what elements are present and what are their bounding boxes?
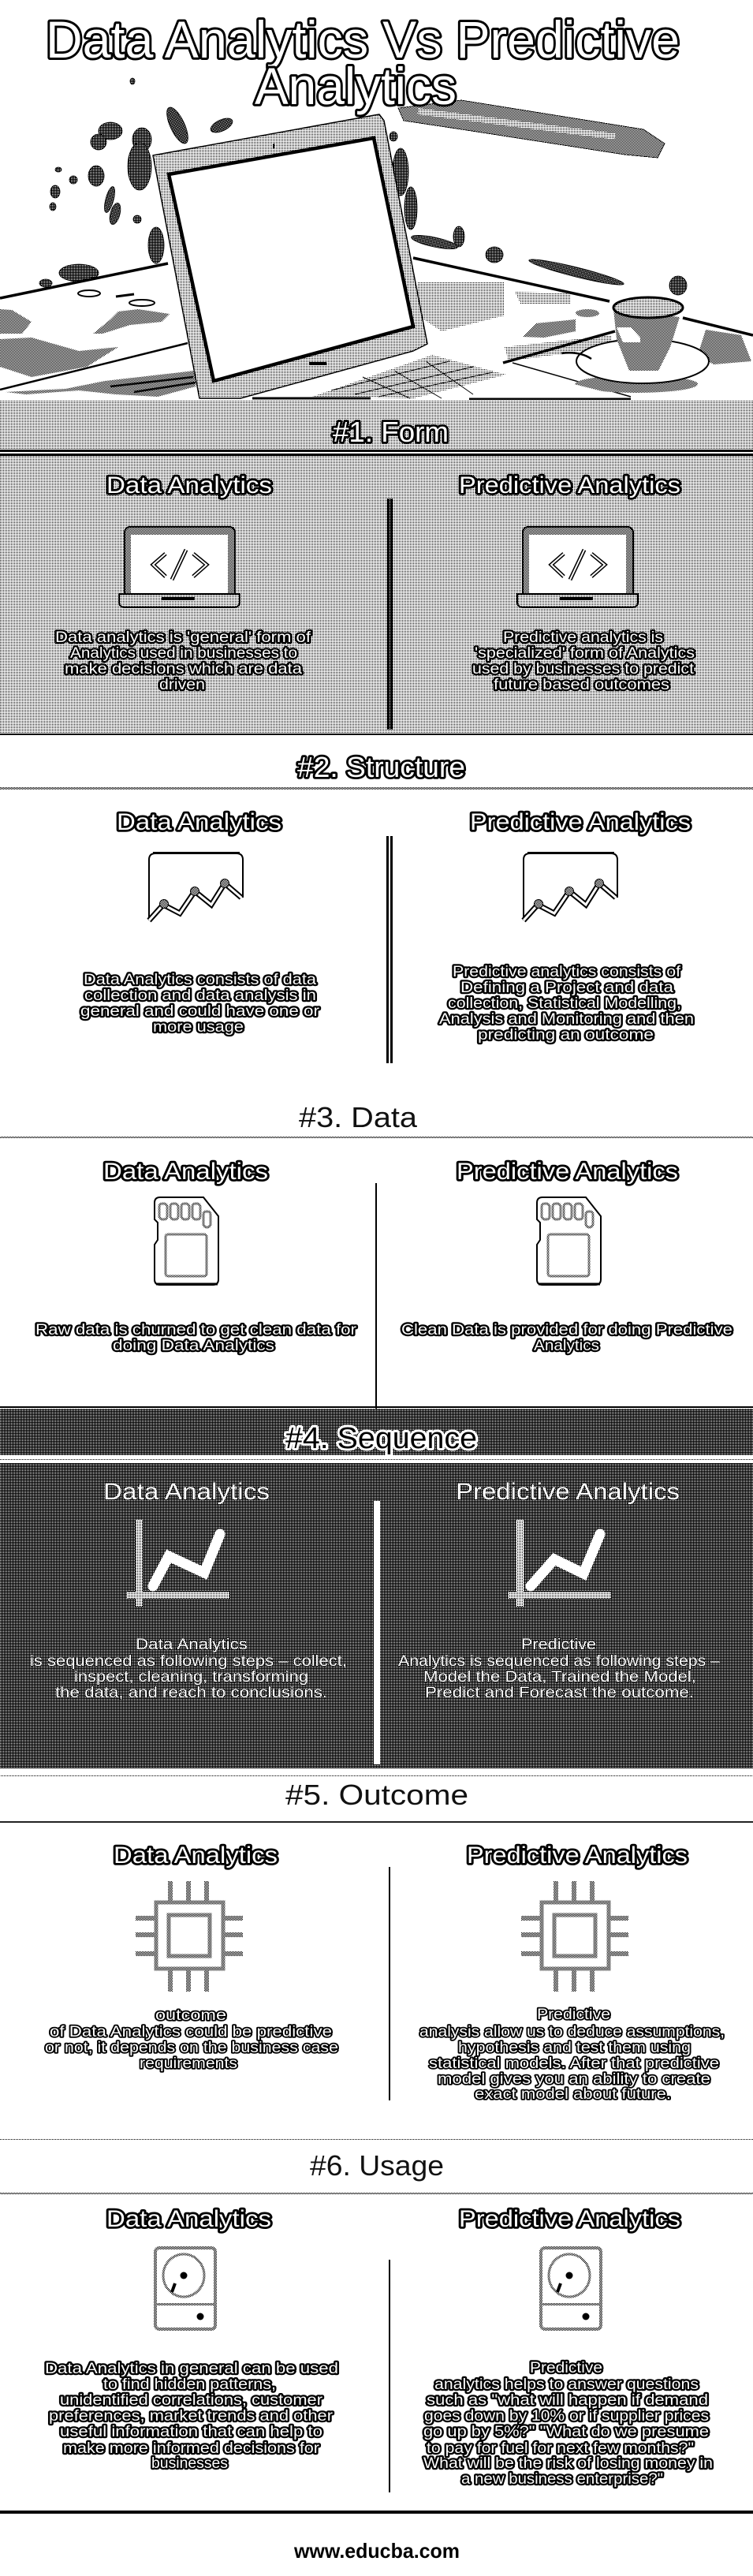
column titles bbox=[114, 1842, 688, 1869]
heading: #2. Structure bbox=[297, 751, 465, 783]
text: predictive analytics usage bbox=[423, 2359, 713, 2488]
text: data analytics usage: unidentified correlations, customer bbox=[60, 2391, 323, 2409]
text: data analytics data: Raw data is churned to get clean data for bbox=[35, 1321, 357, 1338]
text: predictive analytics usage: What will be the risk of losing money in bbox=[423, 2455, 713, 2472]
icon: laptop code right bbox=[517, 527, 638, 607]
footer url: www.educba.com bbox=[293, 2539, 460, 2563]
text: data analytics structure: Data Analytics consists of data bbox=[84, 971, 316, 988]
left desk surface bbox=[0, 290, 196, 397]
icon: chip right bbox=[521, 1881, 628, 1992]
column titles bbox=[103, 1479, 680, 1505]
column titles: Data Analytics bbox=[117, 809, 281, 835]
text: predictive analytics outcome: hypothesis and test them using bbox=[458, 2039, 691, 2056]
section 2: structure bbox=[0, 751, 753, 1063]
column titles: Predictive Analytics bbox=[470, 809, 691, 835]
text: predictive analytics sequence: Model the Data, Trained the Model, bbox=[423, 1668, 696, 1686]
footer rule bbox=[0, 2511, 753, 2514]
title bbox=[46, 10, 680, 115]
desk edges bbox=[0, 258, 753, 335]
text: predictive analytics sequence: Analytics is sequenced as following steps – bbox=[398, 1652, 720, 1670]
text: predictive analytics outcome: statistical models. After that predictive bbox=[429, 2055, 719, 2072]
text: predictive analytics sequence: Predictive bbox=[521, 1636, 596, 1653]
text: predictive analytics structure: Analysis and Monitoring and then bbox=[439, 1010, 694, 1028]
section 4: sequence bbox=[0, 1406, 753, 1776]
right desk surface bbox=[418, 282, 631, 397]
heading: #5. Outcome bbox=[285, 1779, 468, 1811]
text: data analytics sequence: is sequenced as following steps – collect, bbox=[30, 1652, 347, 1670]
icon: line chart right bbox=[509, 1520, 611, 1607]
text: data analytics structure: general and could have one or bbox=[80, 1002, 320, 1020]
title: Data Analytics Vs Predictive bbox=[46, 10, 680, 69]
text: predictive analytics data: Clean Data is provided for doing Predictive bbox=[401, 1321, 732, 1338]
text: data analytics structure bbox=[80, 971, 320, 1036]
divider bbox=[389, 1867, 390, 2100]
laptop lid bbox=[153, 114, 427, 398]
column titles: Data Analytics bbox=[106, 2206, 271, 2232]
column titles: Predictive Analytics bbox=[459, 472, 680, 498]
text: data analytics sequence: the data, and reach to conclusions. bbox=[55, 1684, 327, 1701]
text: data analytics usage: useful information that can help to bbox=[60, 2423, 322, 2440]
divider bbox=[389, 2260, 390, 2492]
background foliage blobs bbox=[39, 78, 687, 295]
text: data analytics outcome: of Data Analytics could be predictive bbox=[50, 2023, 332, 2040]
text: data analytics usage: Data Analytics in general can be used bbox=[45, 2360, 338, 2377]
column titles: Data Analytics bbox=[103, 1159, 268, 1185]
text: predictive analytics usage: Predictive bbox=[530, 2359, 602, 2376]
text: data analytics outcome: outcome bbox=[155, 2007, 226, 2024]
text: predictive analytics form: used by businesses to predict bbox=[472, 660, 695, 678]
hero: laptop on a desk bbox=[0, 78, 753, 399]
column titles: Predictive Analytics bbox=[459, 2206, 680, 2232]
column titles: Predictive Analytics bbox=[467, 1842, 688, 1869]
text: data analytics usage: to find hidden patterns, bbox=[103, 2376, 276, 2393]
icon: chart card right bbox=[524, 852, 617, 920]
section 6: usage bbox=[0, 2149, 753, 2492]
text: predictive analytics outcome bbox=[419, 2006, 725, 2103]
text: data analytics form: Analytics used in businesses to bbox=[70, 644, 297, 662]
column titles bbox=[106, 472, 680, 498]
text: predictive analytics usage: analytics helps to answer questions bbox=[434, 2376, 699, 2393]
panel background bbox=[0, 1406, 753, 1408]
divider bbox=[386, 836, 393, 1063]
icon: chip left bbox=[136, 1881, 243, 1992]
text: predictive analytics outcome: exact model about future. bbox=[475, 2085, 671, 2103]
text: predictive analytics structure: collection, Statistical Modelling, bbox=[448, 995, 681, 1012]
text: data analytics usage: make more informed decisions for bbox=[63, 2440, 320, 2457]
column titles bbox=[106, 2206, 680, 2232]
text: data analytics usage: preferences, market trends and other bbox=[49, 2407, 334, 2425]
section 3: data bbox=[0, 1101, 753, 1410]
text: predictive analytics outcome: Predictive bbox=[537, 2006, 610, 2023]
icon: hard drive left bbox=[155, 2248, 215, 2329]
text: data analytics data bbox=[35, 1321, 357, 1354]
icon: memory card left bbox=[155, 1197, 218, 1285]
text: predictive analytics outcome: analysis allow us to deduce assumptions, bbox=[419, 2023, 725, 2040]
icon: chart card left bbox=[149, 852, 243, 920]
text: data analytics form bbox=[55, 629, 311, 693]
heading: #3. Data bbox=[299, 1101, 418, 1133]
text: predictive analytics usage: a new business enterprise?" bbox=[461, 2470, 663, 2488]
text: predictive analytics sequence bbox=[398, 1636, 720, 1701]
laptop base and keyboard bbox=[240, 344, 631, 398]
title: Analytics bbox=[255, 57, 457, 115]
text: predictive analytics form: future based outcomes bbox=[494, 676, 669, 693]
pen bbox=[398, 100, 665, 158]
text: data analytics sequence bbox=[30, 1636, 347, 1701]
text: predictive analytics structure: Defining a Project and data bbox=[460, 979, 673, 996]
heading: #4. Sequence bbox=[285, 1422, 477, 1455]
text: predictive analytics data: Analytics bbox=[534, 1337, 599, 1354]
icon: hard drive right bbox=[541, 2248, 601, 2329]
text: data analytics outcome: or not, it depends on the business case bbox=[45, 2039, 338, 2056]
text: predictive analytics data bbox=[401, 1321, 732, 1354]
text: predictive analytics usage: such as "what will happen if demand bbox=[427, 2391, 708, 2409]
text: predictive analytics usage: goes down by 10% or if supplier prices bbox=[424, 2407, 709, 2425]
text: data analytics data: doing Data Analytics bbox=[113, 1337, 274, 1354]
panel background bbox=[0, 400, 753, 734]
column titles: Data Analytics bbox=[103, 1479, 270, 1505]
divider bbox=[387, 498, 393, 730]
divider bbox=[375, 1183, 377, 1410]
coffee cup and saucer bbox=[561, 297, 751, 393]
text: data analytics outcome bbox=[45, 2007, 338, 2072]
text: data analytics outcome: requirements bbox=[140, 2055, 237, 2072]
text: predictive analytics structure bbox=[439, 963, 694, 1043]
laptop bbox=[153, 114, 631, 398]
icon: laptop code left bbox=[119, 527, 240, 607]
heading: #6. Usage bbox=[310, 2149, 444, 2182]
column titles bbox=[103, 1159, 678, 1185]
heading: #1. Form bbox=[333, 416, 449, 448]
column titles: Data Analytics bbox=[106, 472, 272, 498]
text: data analytics sequence: Data Analytics bbox=[136, 1636, 248, 1653]
text: data analytics form: make decisions which are data bbox=[65, 660, 302, 678]
text: predictive analytics form bbox=[472, 629, 695, 693]
column titles bbox=[117, 809, 691, 835]
text: predictive analytics outcome: model gives you an ability to create bbox=[438, 2070, 710, 2088]
column titles: Predictive Analytics bbox=[457, 1159, 678, 1185]
text: data analytics sequence: inspect, cleaning, transforming bbox=[74, 1668, 308, 1686]
text: predictive analytics sequence: Predict and Forecast the outcome. bbox=[425, 1684, 694, 1701]
text: predictive analytics structure: predicting an outcome bbox=[478, 1026, 654, 1043]
text: predictive analytics form: Predictive analytics is bbox=[503, 629, 663, 646]
text: predictive analytics usage: to pay for fuel for next few months?" bbox=[427, 2440, 694, 2457]
section 1: form bbox=[0, 400, 753, 735]
text: data analytics usage bbox=[45, 2360, 338, 2472]
laptop screen bbox=[169, 138, 413, 381]
divider bbox=[374, 1501, 380, 1764]
icon: line chart left bbox=[127, 1520, 229, 1607]
icon: memory card right bbox=[537, 1197, 601, 1285]
text: data analytics structure: more usage bbox=[153, 1018, 244, 1036]
text: data analytics form: Data analytics is 'general' form of bbox=[55, 629, 311, 646]
column titles: Predictive Analytics bbox=[456, 1479, 680, 1505]
section 5: outcome bbox=[0, 1779, 753, 2140]
text: predictive analytics usage: go up by 5%?" "What do we presume bbox=[423, 2423, 709, 2440]
text: data analytics structure: collection and data analysis in bbox=[84, 987, 316, 1004]
column titles: Data Analytics bbox=[114, 1842, 278, 1869]
text: data analytics form: driven bbox=[159, 676, 205, 693]
bottom edge line bbox=[252, 398, 631, 399]
text: predictive analytics structure: Predictive analytics consists of bbox=[453, 963, 681, 980]
text: predictive analytics form: 'specialized' form of Analytics bbox=[475, 644, 695, 662]
text: data analytics usage: businesses bbox=[151, 2455, 228, 2472]
